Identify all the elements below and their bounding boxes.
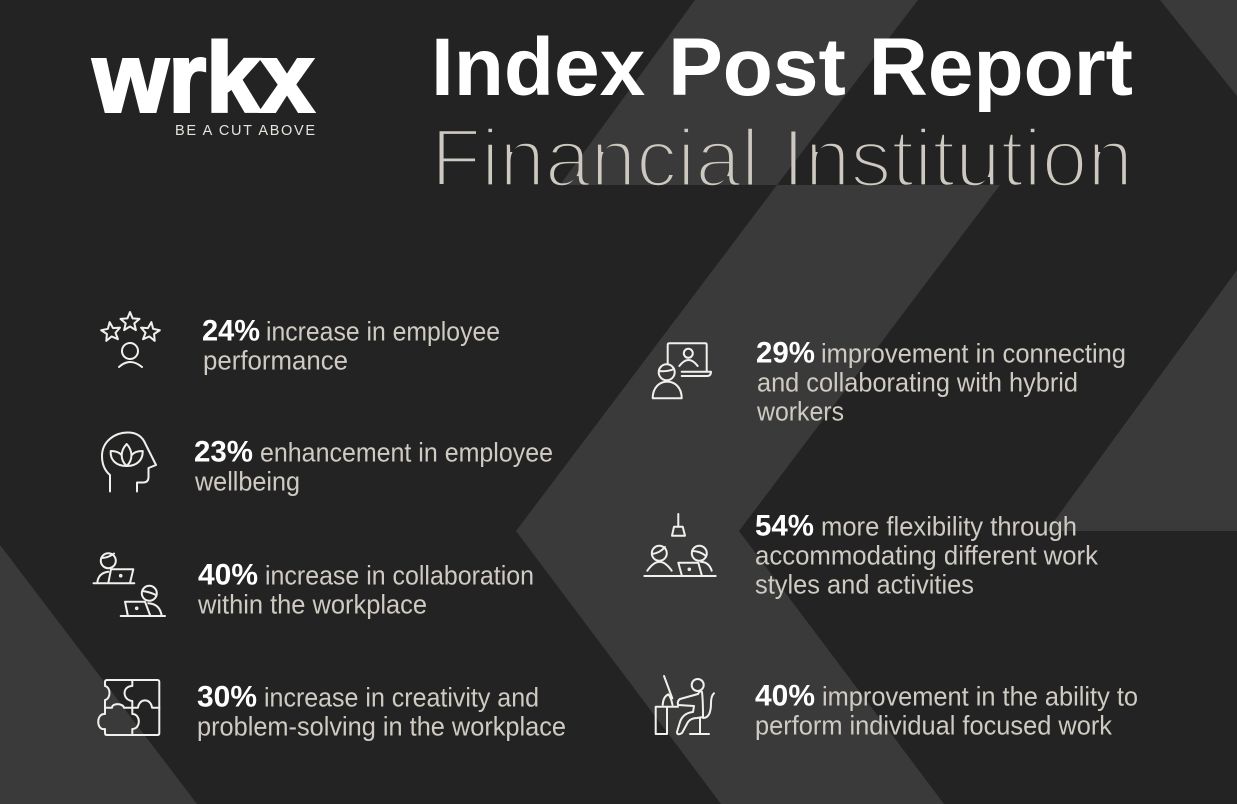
stat: 40% collaboration — [197, 558, 534, 620]
stat: 40% collaboration: 40% — [198, 558, 258, 592]
stat: 24% employee performance: increase in employee — [266, 316, 500, 346]
subtitle: Financial Institution — [431, 113, 1133, 204]
stat: 29% hybrid workers: and collaborating with hybrid — [757, 368, 1078, 398]
stat: 24% employee performance: performance — [203, 346, 348, 376]
stat: 29% hybrid workers: improvement in connecting — [821, 338, 1126, 368]
stat: 23% employee wellbeing — [194, 436, 553, 496]
stat: 29% hybrid workers: workers — [756, 396, 844, 426]
stat: 23% employee wellbeing: 23% — [194, 436, 253, 468]
subtitle — [440, 128, 1126, 186]
stat: 40% focused work: improvement in the ability to — [822, 682, 1138, 712]
stat: 54% flexibility: 54% — [755, 510, 814, 542]
stat: 30% creativity: problem-solving in the workplace — [197, 712, 566, 742]
stat: 54% flexibility: more flexibility through — [821, 512, 1077, 542]
icon: person working at desk — [656, 676, 714, 734]
stat: 30% creativity: increase in creativity and — [264, 682, 539, 712]
icon: two people at table with lamp — [644, 514, 716, 576]
stat: 30% creativity: 30% — [197, 680, 257, 714]
stat: 24% employee performance — [202, 314, 500, 376]
stat: 40% collaboration: within the workplace — [197, 590, 427, 620]
stat: 54% flexibility: styles and activities — [755, 570, 974, 600]
stat: 29% hybrid workers: 29% — [756, 336, 815, 370]
stat: 40% focused work: 40% — [755, 680, 815, 712]
icon: two people on laptops — [94, 553, 165, 616]
icon: person on video call — [653, 343, 711, 398]
logo: BE A CUT ABOVE — [175, 123, 315, 139]
stat: 54% flexibility — [755, 510, 1098, 600]
logo: wrkx — [92, 22, 314, 132]
icon: head with lotus — [102, 432, 156, 492]
stat: 29% hybrid workers — [756, 336, 1126, 426]
icon: stars and person — [100, 312, 161, 367]
stat: 40% focused work: perform individual focused work — [755, 710, 1112, 740]
stat: 30% creativity — [197, 680, 566, 742]
stat: 23% employee wellbeing: enhancement in employee — [260, 438, 553, 468]
stat: 23% employee wellbeing: wellbeing — [194, 466, 300, 496]
icon: puzzle pieces — [98, 680, 159, 735]
stat: 40% focused work — [755, 680, 1138, 740]
stat: 24% employee performance: 24% — [202, 314, 260, 348]
stat: 40% collaboration: increase in collaboration — [265, 560, 534, 590]
stat: 54% flexibility: accommodating different work — [755, 540, 1098, 570]
title: Index Post Report — [431, 22, 1133, 113]
